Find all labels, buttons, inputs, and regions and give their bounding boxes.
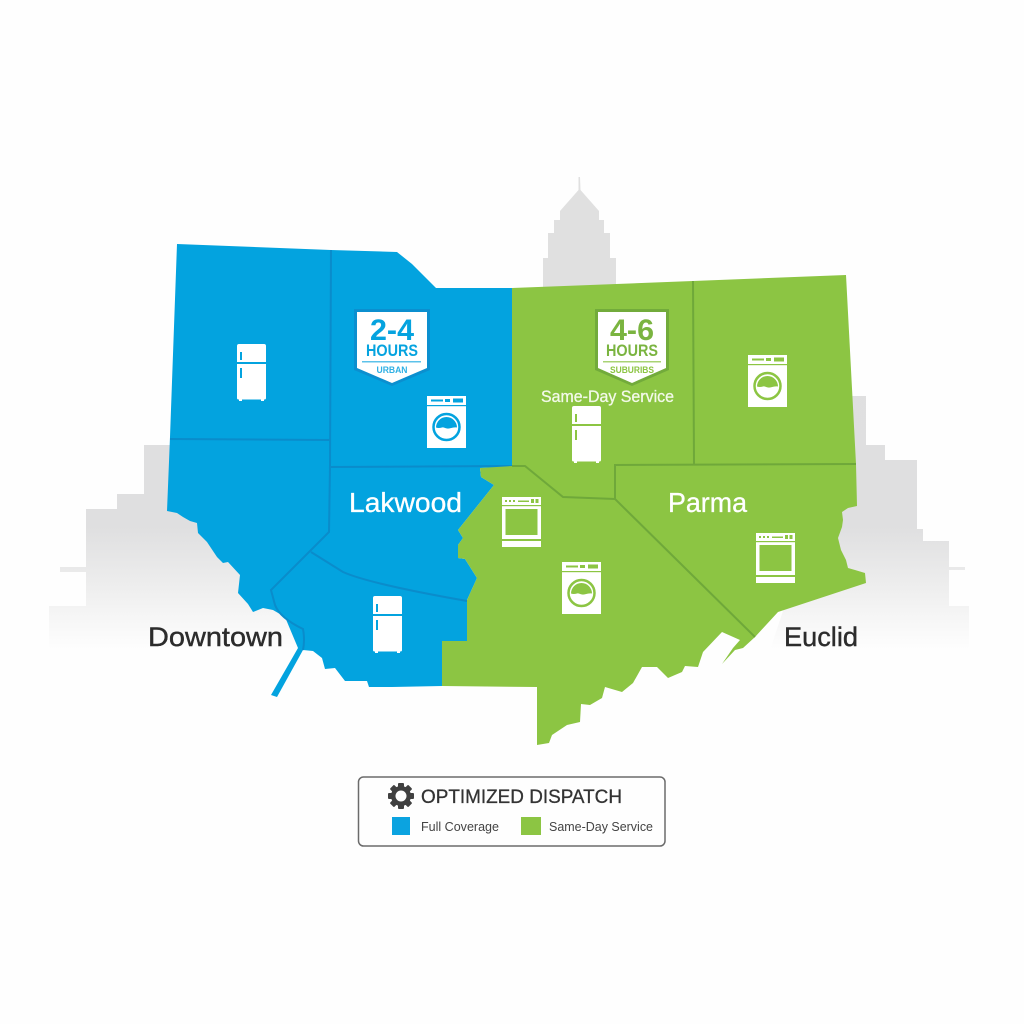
icon: fridge, south blue (373, 596, 402, 653)
icon: oven, central green (502, 497, 541, 547)
badge: 4-6 hours suburbs: SUBURIBS (610, 365, 654, 375)
label: Lakwood: Lakwood (349, 487, 462, 518)
badge: 4-6 hours suburbs: HOURS (606, 341, 658, 360)
background skyline (49, 177, 969, 650)
map: blue full coverage zone (167, 244, 512, 697)
legend text: Same-Day Service: Same-Day Service (549, 820, 653, 834)
label: Parma: Parma (668, 487, 747, 518)
icon: gear (388, 783, 414, 809)
label: Same-Day Service: Same-Day Service (541, 387, 674, 406)
icon: washer, urban (427, 396, 466, 448)
label: Downtown: Downtown (148, 622, 283, 652)
legend text: Full Coverage: Full Coverage (421, 820, 499, 834)
label: Euclid: Euclid (784, 622, 858, 652)
badge: 2-4 hours urban: URBAN (376, 365, 408, 375)
map: green same-day zone (442, 275, 866, 745)
swatch: same-day service (521, 817, 541, 835)
swatch: full coverage (392, 817, 410, 835)
icon: fridge, suburbs (572, 406, 601, 463)
icon: fridge, west blue (237, 344, 266, 401)
badge: 2-4 hours urban (354, 309, 430, 386)
badge: 2-4 hours urban: HOURS (366, 341, 418, 360)
legend (358, 777, 665, 846)
badge: 4-6 hours suburbs (595, 309, 669, 386)
icon: oven, Parma (756, 533, 795, 583)
icon: washer, central green (562, 562, 601, 614)
badge: 2-4 hours urban: 2-4 (370, 314, 414, 347)
badge: 4-6 hours suburbs: 4-6 (610, 314, 654, 347)
icon: washer, northeast green (748, 355, 787, 407)
legend title: OPTIMIZED DISPATCH (421, 786, 622, 808)
